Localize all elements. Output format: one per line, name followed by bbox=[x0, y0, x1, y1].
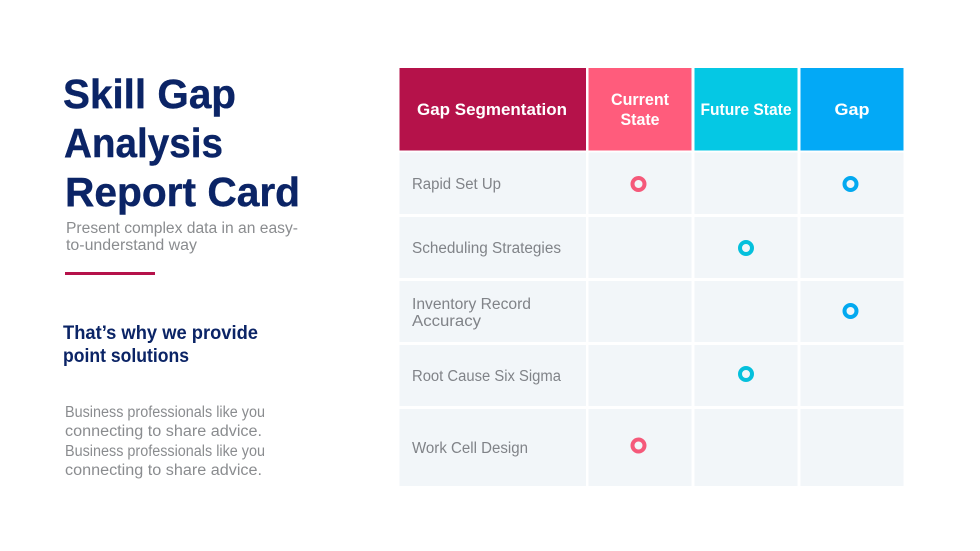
header: Current State bbox=[588, 68, 692, 150]
row: Scheduling Strategies bbox=[400, 217, 904, 278]
table bbox=[400, 68, 904, 486]
subtitle: Present complex data in an easy- bbox=[66, 220, 298, 237]
row: Root Cause Six Sigma: Root Cause Six Sigma bbox=[412, 368, 561, 385]
title: Skill Gap bbox=[63, 71, 236, 117]
row: Inventory Record Accuracy bbox=[400, 281, 904, 342]
header: Gap Segmentation bbox=[400, 68, 586, 150]
subheading: point solutions bbox=[63, 345, 189, 367]
subheading bbox=[63, 322, 258, 367]
subtitle: to-understand way bbox=[66, 237, 197, 254]
row: Root Cause Six Sigma bbox=[400, 345, 904, 406]
row: Rapid Set Up bbox=[400, 152, 904, 214]
row: Work Cell Design: Work Cell Design bbox=[412, 440, 528, 457]
row: Work Cell Design bbox=[400, 409, 904, 486]
header: Future State: Future State bbox=[700, 100, 792, 119]
header: Gap bbox=[800, 68, 904, 150]
subtitle bbox=[66, 220, 298, 254]
header: Future State bbox=[694, 68, 798, 150]
row: Inventory Record Accuracy: Accuracy bbox=[412, 313, 481, 330]
accent line bbox=[65, 272, 155, 275]
title: Report Card bbox=[65, 169, 300, 215]
header: Current State: State bbox=[620, 110, 660, 129]
body text: connecting to share advice. bbox=[65, 423, 262, 440]
row: Rapid Set Up: Rapid Set Up bbox=[412, 176, 501, 193]
header: Gap Segmentation: Gap Segmentation bbox=[417, 100, 567, 119]
body text: Business professionals like you bbox=[65, 443, 265, 460]
body text: connecting to share advice. bbox=[65, 462, 262, 479]
header: Current State: Current bbox=[611, 90, 669, 109]
body text: Business professionals like you bbox=[65, 404, 265, 421]
title bbox=[63, 71, 300, 215]
body text bbox=[65, 404, 265, 479]
row: Inventory Record Accuracy: Inventory Record bbox=[412, 296, 531, 313]
row: Scheduling Strategies: Scheduling Strategies bbox=[412, 240, 561, 257]
header: Gap: Gap bbox=[834, 100, 870, 119]
title: Analysis bbox=[64, 120, 223, 166]
subheading: That’s why we provide bbox=[63, 322, 258, 344]
